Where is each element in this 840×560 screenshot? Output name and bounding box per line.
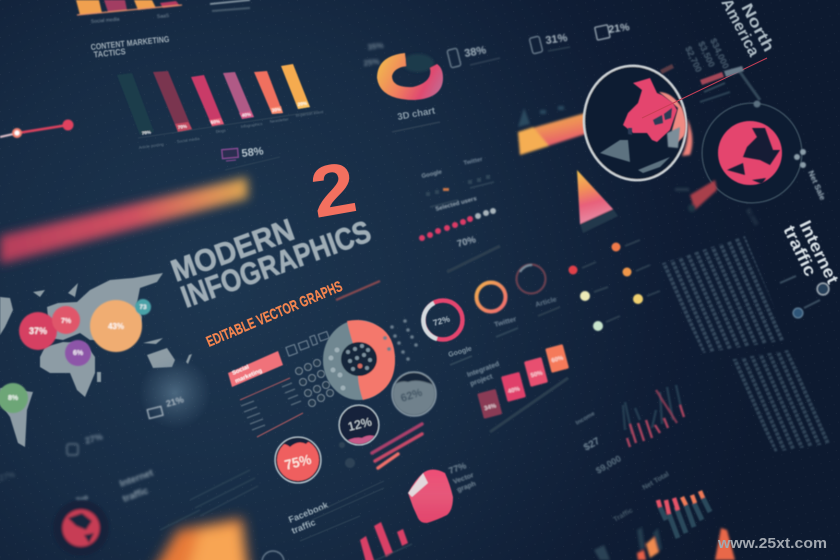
- stat: tablet 27%: [0, 431, 104, 483]
- globe back crescent: [682, 118, 692, 156]
- stat: phone 38%: 38%: [463, 44, 487, 60]
- 3D donut chart: [377, 53, 443, 132]
- integrated project cards: 50%: [530, 370, 544, 379]
- data table: north america: $34,000: [708, 37, 731, 70]
- label: net sale: Net Sale: [806, 169, 827, 202]
- ring chart: orange: [476, 282, 518, 337]
- table: social marketing: [240, 378, 303, 437]
- subtitle: editable vector graphs: EDITABLE VECTOR GRAPHS: [204, 278, 345, 351]
- map bubbles: 37%: [29, 326, 47, 336]
- glowing indicator dots: [568, 240, 660, 331]
- donut legend stats: 25%: [363, 57, 380, 68]
- world map: [0, 273, 192, 447]
- bar chart: grouped: Income: [575, 411, 597, 427]
- heading: content marketing tactics: TACTICS: [93, 46, 126, 59]
- title: modern infographics: MODERN: [166, 212, 299, 289]
- stat: tablet 27%: 27%: [84, 431, 104, 446]
- badge: 12%: [339, 405, 380, 450]
- donut legend stats: [363, 41, 384, 68]
- map bubbles: 43%: [108, 322, 124, 331]
- label: social marketing: marketing: [234, 368, 263, 385]
- stat: laptop 21%: [139, 357, 211, 429]
- bar chart: content marketing tactics: 40%: [241, 112, 251, 118]
- 3D donut chart: 3D chart: [397, 105, 437, 123]
- stat: phone 31%: [529, 32, 570, 54]
- bar chart: facebook traffic: [262, 522, 412, 560]
- heading: internet traffic small: traffic: [121, 485, 150, 505]
- integrated project cards: 60%: [551, 355, 565, 364]
- badge: 62%: [392, 372, 436, 416]
- map bubbles: 8%: [8, 395, 19, 402]
- heading: content marketing tactics: [90, 34, 170, 59]
- blurred gradient band: [0, 177, 248, 264]
- map bubbles: 73: [139, 304, 147, 311]
- text lines: lower list: [160, 470, 258, 530]
- small stats: google and twitter: Google: [421, 169, 443, 180]
- bar chart: content marketing tactics: 20%: [297, 101, 307, 107]
- bar chart: cropped bottom: [594, 527, 662, 560]
- dot rating row: 70%: [456, 234, 478, 250]
- badge: 62%: 62%: [399, 387, 424, 405]
- bar chart: content marketing tactics: Article posting: [138, 142, 164, 150]
- ring chart: dim: Article: [535, 296, 558, 309]
- continent: pale coast: [667, 127, 680, 148]
- donut chart with icons: [323, 320, 395, 400]
- ring chart: 72%: [423, 300, 473, 365]
- bar chart: content marketing tactics: [117, 64, 325, 150]
- dot matrix: [383, 319, 418, 361]
- watermark: www.25xt.com: [717, 535, 827, 552]
- ring chart: 72%: 72%: [432, 313, 451, 328]
- ring chart: dim: [516, 264, 560, 316]
- big number 2: 2: [305, 147, 362, 234]
- stat: 77%: [447, 460, 477, 494]
- continent: pink landmass: [623, 78, 677, 142]
- small red bar bottom globe: [675, 180, 759, 227]
- map bubbles: 6%: [73, 350, 84, 357]
- dot rating row: [419, 196, 500, 272]
- dot rating row: Selected users: [435, 196, 478, 213]
- bar chart: content marketing tactics: Infographics: [240, 121, 263, 129]
- heading: facebook traffic: [287, 481, 384, 541]
- stat: 77%: Vector: [452, 472, 475, 486]
- heading: internet traffic: Internet: [795, 217, 840, 287]
- heading: facebook traffic: traffic: [290, 517, 317, 536]
- cluster markers: [794, 149, 806, 168]
- data table: north america: $3,500: [696, 40, 717, 69]
- integrated project cards: Integrated: [466, 361, 500, 379]
- bar chart: content marketing tactics: 30%: [271, 107, 281, 113]
- stat: 77%: graph: [456, 481, 477, 494]
- globe: small red: [53, 500, 109, 556]
- pyramid chart: [577, 170, 618, 233]
- heading: internet traffic: [779, 217, 840, 287]
- globe with outer ring: [702, 100, 802, 203]
- heading: facebook traffic: Facebook: [287, 499, 331, 525]
- small stats: google and twitter: Twitter: [463, 157, 484, 167]
- 3D pie chart: [408, 470, 453, 523]
- bar chart: content marketing tactics: 70%: [141, 130, 151, 136]
- bar chart: staggered: [612, 471, 710, 538]
- trapezoid chart: [518, 106, 604, 155]
- bar chart: content marketing tactics: Newsletter: [269, 116, 290, 124]
- chart: cropped top bars: SaaS: [157, 13, 170, 20]
- continent: grey lands: [600, 140, 670, 173]
- stat: 58% with monitor icon: [222, 145, 280, 170]
- heading: internet traffic small: [75, 467, 156, 505]
- bar chart: staggered: Net Total: [642, 471, 671, 492]
- chart: cropped top bars: Social media: [91, 17, 120, 25]
- data table: north america: [660, 37, 760, 102]
- stat: phone 31%: 31%: [545, 32, 568, 47]
- stat: phone 38%: [447, 44, 500, 68]
- icon row: [286, 331, 329, 356]
- icon grid: [295, 359, 334, 407]
- small stats: google and twitter: [421, 157, 494, 207]
- heading: north america: North: [737, 1, 777, 55]
- ring chart: orange: Twitter: [494, 316, 517, 329]
- map bubbles: [0, 299, 151, 413]
- bar chart: content marketing tactics: 70%: [177, 124, 187, 130]
- stat: laptop 21%: 21%: [165, 394, 185, 409]
- badge: 75%: [274, 437, 322, 484]
- bar chart: grouped: $9,000: [594, 453, 623, 476]
- integrated project cards: 40%: [507, 386, 521, 395]
- subtitle: editable vector graphs: [204, 278, 380, 351]
- text column: lower: [728, 350, 833, 452]
- continent: salmon edge: [659, 92, 686, 143]
- heading: internet traffic small: Internet: [118, 467, 156, 490]
- label: social marketing: [228, 351, 283, 387]
- heading: internet traffic: traffic: [779, 222, 820, 279]
- text column: upper: [660, 236, 788, 353]
- bar chart: content marketing tactics: In-person event: [295, 109, 325, 118]
- large globe with ring: [575, 58, 695, 188]
- ring chart: 72%: Google: [448, 346, 473, 359]
- heading: internet traffic small: Top: [75, 494, 89, 505]
- data table: north america: $2,700: [683, 45, 704, 74]
- integrated project cards: 34%: [484, 403, 498, 412]
- bar chart: grouped: [575, 385, 684, 476]
- stat: 58% with monitor icon: 58%: [241, 145, 264, 160]
- bar chart: grouped: $27: [582, 436, 602, 454]
- map bubbles: 7%: [61, 318, 72, 325]
- stat: tablet 21%: [595, 21, 631, 40]
- integrated project cards: project: [469, 373, 494, 388]
- bar chart: staggered: Traffic: [612, 507, 634, 524]
- slider: [0, 120, 74, 138]
- stat: 77%: 77%: [447, 460, 468, 476]
- chart: cropped top bars: [76, 0, 250, 25]
- label: social marketing: Social: [231, 364, 250, 377]
- right-edge icons: [780, 276, 829, 318]
- badge: 12%: 12%: [346, 414, 373, 434]
- bar chart: flame: [715, 528, 735, 560]
- title: modern infographics: INFOGRAPHICS: [176, 214, 375, 315]
- globe pointer line: [642, 58, 767, 118]
- bar chart: content marketing tactics: Blogs: [215, 128, 226, 134]
- badge: 75%: 75%: [283, 451, 313, 473]
- continent: dark inlets: [628, 108, 672, 135]
- bar chart: content marketing tactics: 60%: [210, 119, 220, 125]
- heading: content marketing tactics: CONTENT MARKETING: [90, 34, 170, 52]
- bar chart: content marketing tactics: Social media: [176, 136, 201, 144]
- horizontal bars: [339, 424, 422, 468]
- blurred orange block: [148, 518, 250, 560]
- continents: dark cutouts: [727, 128, 780, 184]
- small red bar bottom globe: $2,000: [744, 208, 759, 227]
- integrated project cards: [466, 344, 569, 432]
- stat: tablet 21%: 21%: [608, 21, 631, 36]
- donut legend stats: 35%: [367, 41, 384, 52]
